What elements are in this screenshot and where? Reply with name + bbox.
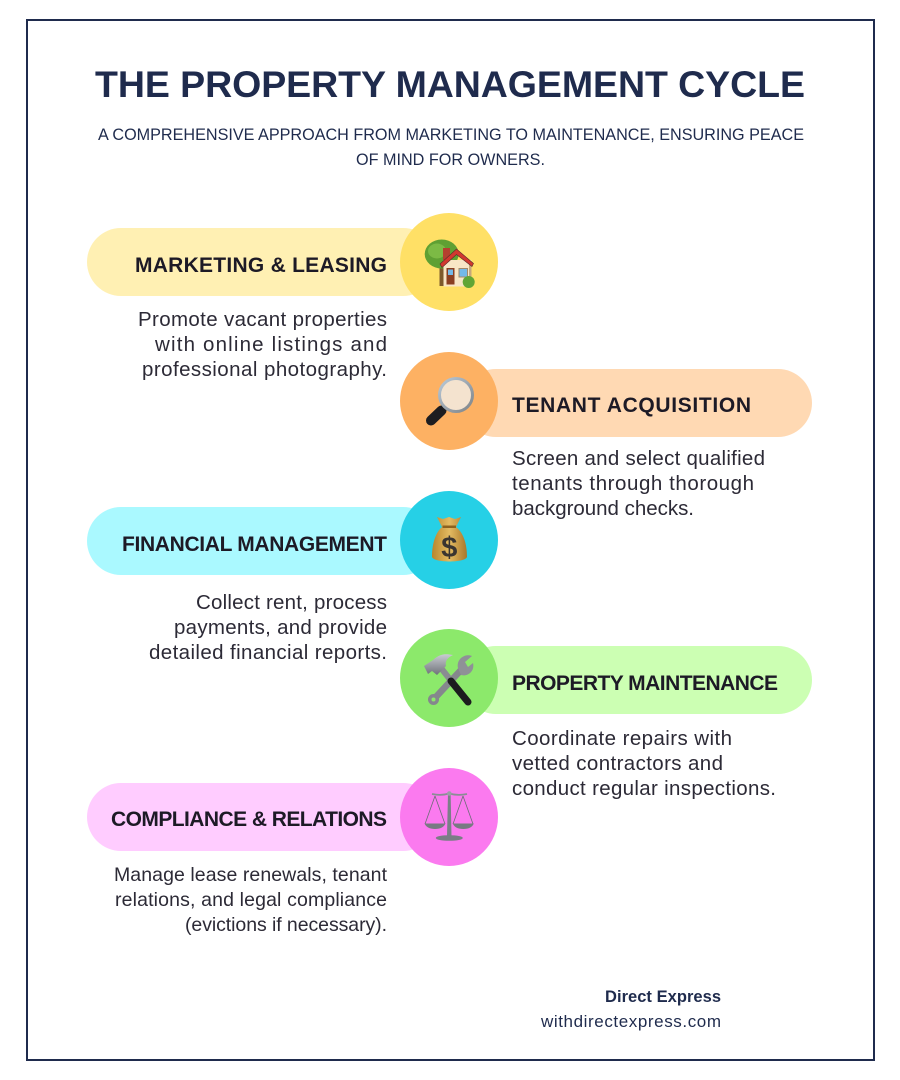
- footer: brand: [540, 988, 721, 1031]
- heading: tenant: TENANT ACQUISITION: [512, 394, 751, 417]
- description: compliance: [114, 864, 388, 936]
- panel: property maintenance: [400, 629, 812, 800]
- description: financial: [149, 591, 387, 664]
- description: financial: payments, and provide: [174, 616, 387, 639]
- icon circle: financial: [400, 491, 498, 589]
- description: marketing: Promote vacant properties: [138, 308, 387, 331]
- icon circle: tenant: [400, 352, 498, 450]
- heading: financial: FINANCIAL MANAGEMENT: [122, 533, 387, 556]
- icon circle: compliance: [400, 768, 498, 866]
- subtitle: OF MIND FOR OWNERS.: [356, 151, 545, 169]
- panel: compliance and relations: [87, 768, 498, 936]
- icon: balance scales: [424, 791, 474, 841]
- subtitle: A COMPREHENSIVE APPROACH FROM MARKETING TO MAINTENANCE, ENSURING PEACE: [98, 126, 804, 144]
- icon: magnifying glass: [431, 378, 472, 420]
- step pill: tenant: [462, 369, 812, 437]
- icon: house with tree: [425, 240, 475, 288]
- panel: financial management: [87, 491, 498, 664]
- dollar sign: $: [441, 532, 457, 564]
- icon: hammer and wrench: [424, 654, 473, 705]
- subtitle: [98, 126, 804, 169]
- panel: marketing and leasing: [87, 213, 498, 381]
- description: compliance: (evictions if necessary).: [185, 914, 387, 936]
- step pill: marketing: [87, 228, 437, 296]
- description: compliance: Manage lease renewals, tenant: [114, 864, 388, 886]
- title: THE PROPERTY MANAGEMENT CYCLE: [95, 63, 805, 105]
- step pill: compliance: [87, 783, 437, 851]
- footer: brand: withdirectexpress.com: [540, 1012, 721, 1031]
- heading: compliance: COMPLIANCE & RELATIONS: [111, 808, 387, 831]
- description: financial: Collect rent, process: [196, 591, 387, 614]
- description: tenant: Screen and select qualified: [512, 447, 765, 470]
- description: marketing: professional photography.: [142, 358, 387, 381]
- description: tenant: tenants through thorough: [512, 472, 754, 495]
- description: marketing: [138, 308, 387, 381]
- step pill: maintenance: [462, 646, 812, 714]
- icon circle: marketing: [400, 213, 498, 311]
- description: maintenance: Coordinate repairs with: [512, 727, 732, 750]
- description: tenant: [512, 447, 765, 520]
- description: maintenance: conduct regular inspections.: [512, 777, 776, 800]
- description: financial: detailed financial reports.: [149, 641, 387, 664]
- heading: maintenance: PROPERTY MAINTENANCE: [512, 672, 778, 695]
- footer: brand: Direct Express: [605, 988, 721, 1006]
- description: tenant: background checks.: [512, 497, 694, 520]
- description: marketing: with online listings and: [154, 333, 387, 356]
- description: compliance: relations, and legal compliance: [115, 889, 387, 911]
- panel: tenant acquisition: [400, 352, 812, 520]
- step pill: financial: [87, 507, 437, 575]
- icon: money bag: [432, 517, 467, 564]
- icon circle: maintenance: [400, 629, 498, 727]
- description: maintenance: vetted contractors and: [512, 752, 723, 775]
- description: maintenance: [512, 727, 776, 800]
- heading: marketing: MARKETING & LEASING: [135, 254, 387, 277]
